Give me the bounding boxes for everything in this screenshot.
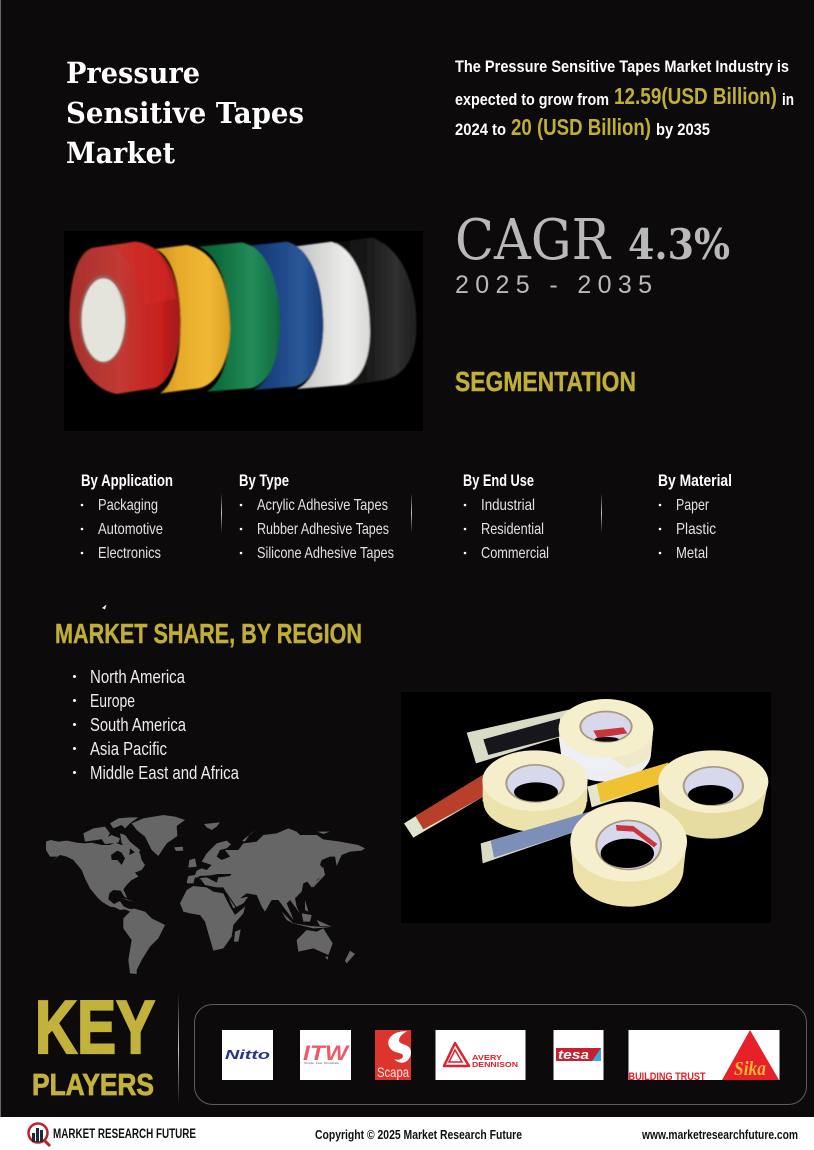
Canadian arctic islands <box>83 827 110 842</box>
region list: South America <box>90 715 187 735</box>
column: by material <box>658 471 732 562</box>
logo: tesa: tesa <box>558 1047 589 1062</box>
New Zealand <box>345 951 355 963</box>
region list: Asia Pacific <box>90 739 167 759</box>
column: by type <box>239 471 394 562</box>
black strip <box>467 709 570 763</box>
logo: Scapa: Scapa <box>377 1064 409 1080</box>
logo: Avery Dennison: AVERY <box>472 1053 502 1062</box>
region list: Europe <box>90 691 135 711</box>
Southeast Asia and Indonesia <box>282 912 293 923</box>
logo: ITW: ITW <box>303 1042 351 1065</box>
image: coloured tape rolls <box>64 231 423 431</box>
column: by end use: Residential <box>481 521 544 538</box>
logo: Sika: Sika <box>734 1058 766 1080</box>
logo: Sika: BUILDING TRUST <box>628 1071 706 1083</box>
Hudson Bay <box>111 851 125 865</box>
footer: MARKET RESEARCH FUTURE <box>53 1126 196 1141</box>
world map <box>46 815 365 974</box>
footer <box>0 1117 814 1150</box>
logo: Sika <box>628 1030 780 1083</box>
roll front <box>573 830 684 907</box>
column: by end use: Commercial <box>481 545 549 562</box>
column: by material: By Material <box>658 471 732 490</box>
column: by type: By Type <box>239 471 289 490</box>
Red Sea <box>226 893 236 907</box>
panel: key player logos <box>194 1004 806 1104</box>
heading: segmentation: SEGMENTATION <box>455 366 636 397</box>
column: by application <box>81 471 173 562</box>
red strip <box>404 772 488 838</box>
logo: Scapa <box>375 1030 411 1080</box>
yellow strip <box>587 763 668 807</box>
column: by material: Metal <box>676 545 708 562</box>
logo: Nitto: Nitto <box>225 1047 270 1062</box>
UK <box>188 858 197 868</box>
blue strip <box>481 811 593 863</box>
logo: ITW: Simple. Fast. Worldwide. <box>304 1061 340 1065</box>
footer: Copyright © 2025 Market Research Future <box>315 1127 522 1142</box>
column: by type: Silicone Adhesive Tapes <box>257 545 394 562</box>
Arctic islands <box>242 829 257 842</box>
market summary text: 20 (USD Billion) <box>511 114 651 140</box>
Japan <box>310 867 325 887</box>
column: by end use: By End Use <box>463 471 534 490</box>
Mediterranean and Black Sea <box>195 874 232 883</box>
region list: North America <box>90 667 186 687</box>
market summary text: in <box>782 90 794 109</box>
key players heading: PLAYERS <box>32 1067 154 1102</box>
logo: Avery Dennison <box>436 1030 526 1080</box>
column: by material: Plastic <box>676 521 716 538</box>
North America <box>46 840 145 912</box>
column: by end use <box>463 471 549 562</box>
CAGR: CAGR <box>455 208 612 273</box>
Greenland <box>132 815 185 856</box>
heading: market share by region: MARKET SHARE, BY REGION <box>55 618 362 649</box>
column: by application: Electronics <box>98 545 161 562</box>
key players heading <box>32 985 155 1102</box>
Madagascar <box>234 929 241 942</box>
market summary text: by 2035 <box>656 120 710 139</box>
logo: Market Research Future <box>28 1124 50 1146</box>
column: by application: Packaging <box>98 497 158 514</box>
market summary text: expected to grow from <box>455 90 609 109</box>
market summary text: 2024 to <box>455 120 506 139</box>
column: by application: Automotive <box>98 521 163 538</box>
Caribbean <box>120 898 135 902</box>
title: Sensitive Tapes <box>66 96 304 130</box>
title: Market <box>66 136 176 170</box>
title: Pressure <box>66 56 200 90</box>
image: masking tape rolls <box>401 692 771 923</box>
region list: Middle East and Africa <box>90 763 240 783</box>
logo: tesa <box>554 1030 604 1080</box>
logo: Nitto <box>222 1030 273 1080</box>
market summary text: 12.59(USD Billion) <box>614 83 777 109</box>
CAGR <box>455 208 730 299</box>
column: by material: Paper <box>676 497 710 514</box>
roll right <box>660 775 763 839</box>
market summary text <box>455 57 794 140</box>
Africa <box>180 886 245 951</box>
column: by type: Rubber Adhesive Tapes <box>257 521 389 538</box>
roll top <box>561 725 651 782</box>
logo: Avery Dennison: DENNISON <box>472 1060 518 1069</box>
CAGR: 4.3% <box>628 220 730 269</box>
logo: ITW <box>300 1030 351 1080</box>
CAGR: 2025 - 2035 <box>455 271 652 299</box>
column: by application: By Application <box>81 471 173 490</box>
roll left <box>483 772 587 832</box>
Australia <box>297 928 333 955</box>
column: by type: Acrylic Adhesive Tapes <box>257 497 388 514</box>
Eurasia <box>187 828 365 920</box>
region list <box>73 667 240 783</box>
column: by end use: Industrial <box>481 497 535 514</box>
South America <box>123 908 165 974</box>
key players heading: KEY <box>35 985 155 1069</box>
title <box>66 56 304 170</box>
